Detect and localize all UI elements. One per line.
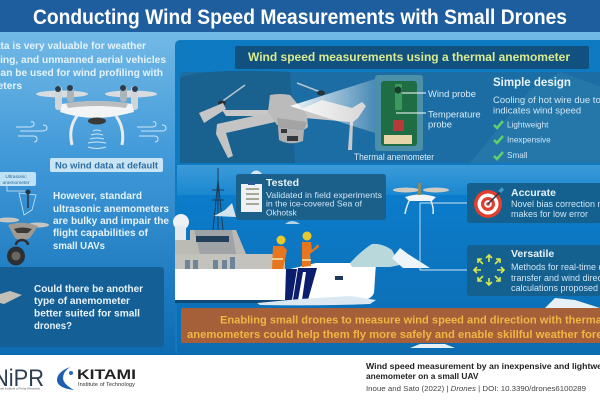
icon: hovering drone with no wind data [16, 85, 166, 148]
accurate box [467, 183, 600, 223]
tested box: in the ice-covered Sea of [266, 198, 363, 208]
tested box: Validated in field experiments [266, 190, 382, 200]
question panel: drones? [34, 321, 72, 332]
probe labels: Temperature [428, 108, 481, 120]
text: ultrasonic anemometer problem [53, 191, 169, 252]
text block: simple design: Lightweight [507, 120, 549, 130]
question panel: better suited for small [34, 308, 140, 320]
icon: drone with heavy anemometer and kettlebell [0, 186, 49, 266]
text block: simple design: Inexpensive [507, 136, 551, 144]
text: ultrasonic anemometer problem: flight capabilities of [53, 228, 149, 239]
icon: small drone with connectors [393, 183, 467, 270]
logo: NiPR: nal Institute of Polar Research [0, 386, 41, 390]
icon: large drone with beam [199, 79, 375, 158]
text block: simple design: Simple design [493, 77, 571, 89]
panel: thermal anemometer measurements [173, 40, 600, 355]
versatile box [467, 245, 600, 296]
text block: simple design: Small [507, 151, 528, 160]
heading: wind speed measurements: Wind speed measurements using a thermal anemometer [248, 50, 570, 64]
question panel [0, 267, 164, 347]
label: ultrasonic anemometer: Ultrasonic [5, 174, 27, 180]
label: no wind data: No wind data at default [55, 160, 158, 170]
text: ultrasonic anemometer problem: However, standard [53, 191, 142, 202]
probe labels: Thermal anemometer [354, 151, 434, 162]
tested box: Okhotsk [266, 208, 298, 218]
accurate box: Accurate [511, 187, 556, 199]
question panel: type of anemometer [34, 296, 130, 307]
title bar: Conducting Wind Speed Measurements with Small Drones [33, 6, 567, 29]
logo: Kitami: KITAMI [77, 367, 136, 382]
label: ultrasonic anemometer [0, 172, 36, 186]
title bar [0, 0, 600, 32]
logo: Kitami: Institute of Technology [78, 382, 135, 388]
conclusion banner [181, 308, 600, 343]
text block: simple design [493, 77, 600, 160]
tested box: Tested [266, 177, 299, 189]
accurate box: makes for low error [511, 209, 588, 219]
citation: Inoue and Sato (2022) | Drones | DOI: 10.3390/drones6100289 [366, 384, 586, 393]
text block: simple design: indicates wind speed [493, 106, 581, 116]
probe labels: probe [428, 118, 452, 130]
probe labels: Wind probe [428, 88, 476, 99]
text: ultrasonic anemometer problem: are bulky and impair the [53, 216, 169, 227]
iceberg [214, 170, 600, 348]
icon: thermal anemometer circuit board [375, 75, 426, 151]
tested box [236, 174, 386, 220]
versatile box: Versatile [511, 248, 554, 260]
citation: anemometer on a small UAV [366, 371, 479, 381]
intro text [0, 41, 166, 92]
text: ultrasonic anemometer problem: small UAVs [53, 241, 105, 252]
logo: Kitami [57, 367, 136, 390]
citation [366, 361, 600, 393]
footer background [0, 355, 600, 400]
question panel: Could there be another [34, 284, 143, 295]
text: ultrasonic anemometer problem: ultrasonic anemometers [53, 204, 169, 215]
icon: ship with scientists [173, 168, 376, 305]
versatile box: calculations proposed [511, 283, 598, 293]
probe labels [354, 88, 481, 162]
label: ultrasonic anemometer: anemometer [3, 180, 30, 186]
heading: wind speed measurements [235, 46, 589, 69]
